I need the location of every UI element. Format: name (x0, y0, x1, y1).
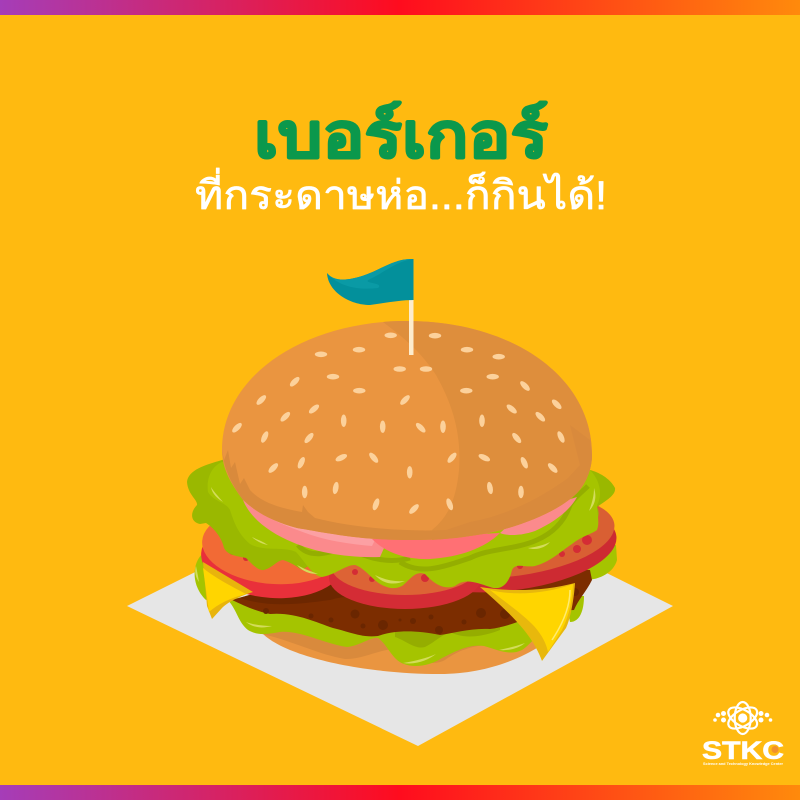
lower lettuce (228, 585, 570, 666)
right tomato (389, 484, 621, 602)
onion left highlight (243, 490, 380, 546)
logo tagline: Science and Technology Knowledge Center (703, 762, 784, 766)
middle tomato (329, 537, 481, 609)
STKC logo (702, 702, 784, 766)
bottom bun (258, 620, 540, 674)
flag (327, 259, 414, 355)
upper lettuce dark layer (187, 400, 615, 570)
patty (232, 565, 592, 636)
left cheese (203, 562, 253, 619)
patty holes (263, 588, 579, 634)
logo wordmark: STKC (702, 737, 784, 765)
patty shadow (240, 580, 480, 606)
bun bottom shade (222, 425, 592, 540)
lettuce highlights (195, 487, 595, 663)
title: เบอร์เกอร์ (254, 101, 548, 171)
bottom gradient bar (0, 785, 800, 800)
onion left slice (243, 490, 392, 557)
tomato seeds showing under lettuce (228, 535, 592, 582)
right cheese (480, 583, 575, 661)
burger illustration (187, 259, 621, 674)
left tomato (198, 503, 348, 603)
logo orange dot (772, 746, 778, 753)
onion right slice (500, 497, 577, 535)
logo atom icon (725, 702, 761, 734)
sesame seeds (231, 332, 566, 515)
onion middle slice (372, 533, 500, 559)
top bun (222, 321, 592, 540)
subtitle: ที่กระดาษห่อ...ก็กินได้! (195, 168, 607, 218)
logo dots (713, 711, 772, 722)
back lettuce edges (195, 545, 617, 622)
lower lettuce shadow (395, 622, 500, 648)
paper wrapper (127, 470, 673, 746)
bun right shade (383, 321, 592, 540)
upper lettuce folds (298, 486, 588, 569)
upper lettuce light layer (208, 462, 600, 588)
top gradient bar (0, 0, 800, 15)
